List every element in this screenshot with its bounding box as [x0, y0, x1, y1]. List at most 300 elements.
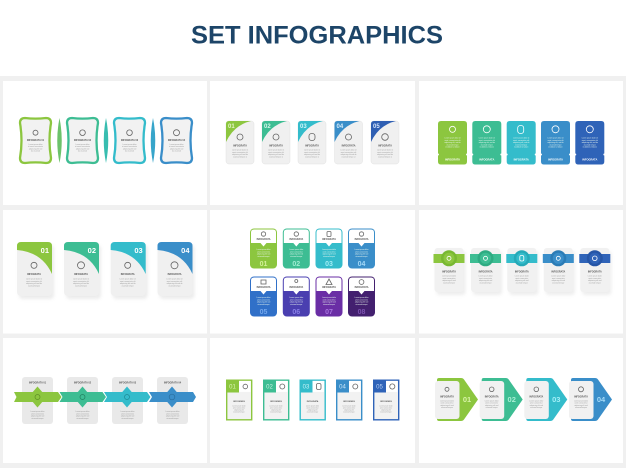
grey card 4: eiusmod tempor [166, 417, 179, 420]
card 02: eiusmod tempor [75, 284, 87, 287]
grey card 2: INFOGRATA 02 [74, 382, 92, 384]
grey card 4 [157, 377, 188, 424]
ticket 2: adipiscing elit, sed do [479, 141, 495, 144]
card 07 [316, 276, 342, 316]
card 04 [334, 121, 362, 164]
card 05: adipiscing elit sed do [377, 153, 393, 156]
card 06: amet consectetur [290, 298, 303, 301]
card 05: INFOGRATA [257, 286, 271, 289]
arrow card 04: eiusmod tempor [575, 406, 587, 409]
arrow card 02: Lorem ipsum dolor [485, 400, 499, 402]
card 1: eiusmod tempor [443, 281, 455, 284]
grey card 4: INFOGRATA 04 [164, 382, 182, 384]
card 08: INFOGRATA [355, 286, 369, 289]
title: SET INFOGRAPHICS [191, 22, 443, 50]
card 2: Lorem ipsum dolor [479, 276, 492, 278]
arrow card 04: 04 [597, 395, 606, 404]
card 06: adipiscing elit sed [290, 301, 303, 304]
card 2: amet consectetur [479, 277, 492, 280]
card 1: do eiusmod [31, 151, 40, 153]
card 01: INFOGRATA [233, 144, 247, 148]
card 03: INFOGRATA [305, 144, 319, 148]
card 5: Lorem ipsum dolor [588, 276, 602, 278]
card 04: Lorem ipsum dolor sit [166, 278, 183, 280]
ticket 1: incididunt ut labore [445, 146, 460, 149]
card 05: adipiscing elit sed [257, 301, 270, 304]
arrow card 03: INFOGRATA [529, 396, 543, 398]
ticket 5 [575, 121, 604, 164]
card 05: INFOGRATA [378, 144, 392, 148]
card 04: amet consectetur elit [167, 280, 183, 283]
card 5: INFOGRATA [588, 270, 602, 274]
card 08: Lorem ipsum dolor [355, 297, 368, 299]
card 05: Lorem ipsum dolor [257, 297, 270, 299]
arrow card 02 [480, 378, 523, 421]
grey card 3: amet consectetur [121, 412, 134, 415]
ticket 1: Lorem ipsum dolor sit [444, 138, 461, 140]
card 1: INFOGRATA 01 [27, 139, 45, 142]
arrow card 04: Lorem ipsum dolor [574, 400, 588, 402]
ticket 3 [507, 121, 536, 164]
arrow card 02: adipiscing elit sed [485, 404, 498, 407]
card 03 [316, 228, 342, 268]
card 02: adipiscing elit [271, 408, 281, 412]
card 05: Lorem ipsum dolor [379, 406, 393, 408]
card 2: INFOGRATA 02 [74, 139, 92, 142]
card 02: INFOGRATA [289, 238, 303, 241]
card 05: 05 [373, 124, 380, 130]
card 04: adipiscing elit sed do [341, 153, 356, 156]
arrow card 01: INFOGRATA [440, 396, 454, 398]
ticket 1: amet, consectetur elit [444, 139, 461, 142]
grey card 4: Lorem ipsum dolor [166, 411, 179, 413]
grey card 1: eiusmod tempor [31, 417, 44, 420]
card 3 [506, 248, 538, 295]
divider lens 1 [57, 118, 62, 163]
grey card 2: Lorem ipsum dolor [76, 411, 89, 413]
card 04: INFOGRATA [355, 238, 369, 241]
card 02: amet consectetur elit [73, 280, 89, 283]
card 03: Lorem ipsum dolor sit [120, 278, 136, 280]
card 03: eiusmod tempor [122, 284, 134, 287]
card 08: amet consectetur [355, 298, 368, 301]
card 5: amet consectetur [588, 277, 602, 280]
card 08 [348, 276, 375, 316]
card 02: 02 [266, 384, 273, 390]
card 01: amet consectetur elit [232, 151, 248, 154]
grey card 2: eiusmod tempor [76, 417, 89, 420]
card 04: INFOGRATA [168, 273, 182, 276]
card 3 [114, 118, 145, 163]
card 2: INFOGRATA [479, 270, 493, 274]
card 02: INFOGRATA [269, 144, 283, 148]
grey card 1 [22, 377, 53, 424]
card 01: adipiscing elit sed do [26, 282, 42, 285]
arrow card 03: eiusmod tempor [530, 406, 543, 409]
card 05 [373, 380, 399, 420]
card 04: 04 [336, 124, 344, 130]
card 04: eiusmod tempor [343, 410, 355, 414]
arrow card 03: amet consectetur [530, 402, 543, 405]
card 06: Lorem ipsum dolor [289, 297, 303, 299]
ticket 3: eiusmod tempor [515, 143, 528, 146]
card 04: INFOGRATA [342, 144, 356, 148]
ticket 4: INFOGRATA [548, 158, 563, 162]
card 01: Lorem ipsum dolor sit [232, 150, 248, 152]
panel: arrow timeline [3, 338, 207, 463]
card 01: eiusmod tempor [28, 284, 40, 287]
card 1: sit amet consectetur [28, 145, 43, 148]
card 04: Lorem ipsum dolor sit [340, 150, 357, 152]
card 08: 08 [358, 309, 365, 316]
card 04: adipiscing elit sed do [167, 282, 182, 285]
card 03 [298, 121, 326, 164]
card 05: INFOGRATA [380, 400, 392, 403]
card 5: adipiscing elit sed [588, 279, 602, 282]
card 05: eiusmod tempor [257, 303, 270, 306]
panel: eight pointer cards [210, 210, 415, 334]
arrow card 01: eiusmod tempor [441, 406, 453, 409]
card 3: Lorem ipsum dolor [515, 276, 529, 278]
card 3: Lorem ipsum dolor [123, 144, 136, 146]
card 02: amet consectetur [290, 250, 303, 253]
card 04 [336, 380, 362, 420]
grey card 4: adipiscing elit sed [166, 415, 179, 418]
ticket 3: adipiscing elit, sed do [513, 141, 529, 144]
card 05 [250, 276, 277, 316]
card 02: INFOGRATA [74, 273, 88, 276]
ticket 2 [472, 121, 501, 164]
card 03: INFOGRATA [121, 273, 135, 276]
grey card 2: adipiscing elit sed [76, 415, 89, 418]
card 02: eiusmod tempor ut [269, 155, 284, 158]
card 3: INFOGRATA [515, 270, 529, 274]
card 01: eiusmod tempor [257, 255, 270, 258]
card 02: adipiscing elit sed do [73, 282, 89, 285]
card 01: Lorem ipsum dolor sit [26, 278, 42, 280]
card 3: amet consectetur [515, 277, 529, 280]
card 04: eiusmod tempor [355, 255, 368, 258]
card 01: INFOGRATA [233, 400, 245, 403]
card 03: INFOGRATA [322, 238, 336, 241]
card 03: amet consectetur elit [304, 151, 320, 154]
card 04: amet consectetur elit [341, 151, 357, 154]
card 02 [262, 121, 290, 164]
card 1 [20, 118, 51, 163]
card 01: 01 [260, 261, 267, 268]
card 03: eiusmod tempor [307, 410, 319, 414]
card 06: INFOGRATA [289, 286, 303, 289]
arrow card 03: 03 [552, 395, 560, 404]
card 03: adipiscing elit sed do [304, 153, 320, 156]
panel: outlined cards with number tab [210, 338, 415, 463]
card 05: 05 [260, 309, 267, 316]
card 02: eiusmod tempor [270, 410, 282, 414]
card 03: INFOGRATA [307, 400, 319, 403]
card 08: adipiscing elit sed [355, 301, 368, 304]
card 4 [161, 118, 192, 163]
card 01: amet consectetur [233, 406, 246, 410]
card 04: eiusmod tempor [168, 284, 181, 287]
card 01: 01 [41, 246, 49, 255]
card 06: eiusmod tempor [290, 303, 303, 306]
card 01: Lorem ipsum dolor [232, 406, 246, 408]
card 2 [470, 248, 502, 295]
ticket 2: eiusmod tempor [481, 143, 493, 146]
panel: band and circle cards [419, 210, 623, 334]
ticket 1: INFOGRATA [445, 158, 460, 162]
card 05: eiusmod tempor ut [378, 155, 393, 158]
card 01: Lorem ipsum dolor [257, 249, 270, 251]
arrow card 02: INFOGRATA [485, 396, 499, 398]
card 4: Lorem ipsum dolor [551, 276, 565, 278]
arrow card 04: INFOGRATA [574, 396, 588, 398]
panel: curved top cards [3, 210, 207, 334]
card 01: INFOGRATA [27, 273, 41, 276]
card 4: eiusmod tempor [552, 281, 565, 284]
card 02: amet consectetur elit [268, 151, 284, 154]
card 03: eiusmod tempor [323, 255, 335, 258]
card 03 [300, 380, 325, 420]
card 02 [64, 242, 101, 299]
card 04: amet consectetur [343, 406, 356, 410]
card 02: adipiscing elit sed do [268, 153, 284, 156]
card 02: Lorem ipsum dolor sit [73, 278, 89, 280]
card 3: adipiscing elit sed [123, 147, 136, 150]
card 05: 05 [376, 384, 383, 390]
grey card 2: amet consectetur [76, 412, 89, 415]
card 03: amet consectetur elit [120, 280, 136, 283]
card 02 [263, 380, 289, 420]
card 05: eiusmod tempor [380, 410, 392, 414]
grey card 3: Lorem ipsum dolor [121, 411, 134, 413]
card 4: do eiusmod [172, 151, 181, 153]
card 01: adipiscing elit sed do [232, 153, 248, 156]
card 04: eiusmod tempor ut [342, 155, 356, 158]
grey card 3 [112, 377, 143, 424]
card 03: 03 [303, 384, 310, 390]
arrow 2 [60, 386, 106, 408]
card 04: adipiscing elit sed [355, 253, 368, 256]
card 02 [283, 228, 310, 268]
grey card 3: eiusmod tempor [121, 417, 134, 420]
card 01: adipiscing elit sed [257, 253, 270, 256]
ticket 5: Lorem ipsum dolor sit [582, 138, 598, 140]
card 2 [67, 118, 98, 163]
card 01: 01 [228, 124, 235, 130]
card 07: 07 [325, 309, 333, 316]
card 3: do eiusmod [125, 151, 134, 153]
ticket 5: adipiscing elit, sed do [582, 141, 598, 144]
card 04: 04 [358, 261, 365, 268]
card 02: eiusmod tempor [290, 255, 303, 258]
arrow card 02: eiusmod tempor [486, 406, 498, 409]
card 05: adipiscing elit [381, 408, 391, 412]
card 4: Lorem ipsum dolor [170, 144, 183, 146]
card 03: eiusmod tempor ut [305, 155, 320, 158]
card 1: Lorem ipsum dolor [29, 144, 42, 146]
arrow card 02: 02 [508, 395, 516, 404]
card 01: INFOGRATA [257, 238, 271, 241]
card 4: sit amet consectetur [169, 145, 184, 148]
arrow 1 [14, 386, 62, 408]
ticket 4: eiusmod tempor [549, 143, 562, 146]
card 04: adipiscing elit [344, 408, 354, 412]
card 2: adipiscing elit sed [479, 279, 492, 282]
card 02: adipiscing elit sed [290, 253, 303, 256]
card 03 [111, 242, 148, 299]
card 2: eiusmod tempor [479, 281, 492, 284]
card 03: adipiscing elit [308, 408, 318, 412]
card 07: Lorem ipsum dolor [322, 297, 336, 299]
arrow 3 [104, 386, 150, 408]
card 1 [434, 248, 466, 295]
grey card 1: INFOGRATA 01 [29, 382, 47, 384]
ticket 1 [438, 121, 467, 164]
card 05: Lorem ipsum dolor sit [377, 150, 393, 152]
card 1: INFOGRATA [442, 270, 456, 274]
ticket 4: amet, consectetur elit [547, 139, 564, 142]
arrow card 04: amet consectetur [575, 402, 588, 405]
card 02: 02 [292, 261, 300, 268]
arrow card 04 [569, 378, 612, 421]
ticket 5: incididunt ut labore [583, 146, 597, 149]
ticket 5: amet, consectetur elit [582, 139, 598, 142]
ticket 4: Lorem ipsum dolor sit [547, 138, 564, 140]
card 2: Lorem ipsum dolor [76, 144, 89, 146]
card 04 [348, 228, 375, 268]
card 5 [579, 248, 611, 295]
arrow card 01: adipiscing elit sed [440, 404, 454, 407]
card 2: adipiscing elit sed [76, 147, 89, 150]
card 03: adipiscing elit sed [322, 253, 336, 256]
card 06: 06 [292, 309, 300, 316]
grey card 3: adipiscing elit sed [121, 415, 134, 418]
card 01: adipiscing elit [234, 408, 244, 412]
card 3: sit amet consectetur [122, 145, 137, 148]
ticket 1: adipiscing elit, sed do [444, 141, 461, 144]
ticket 1: eiusmod tempor [446, 143, 459, 146]
panel: ticket cards [419, 81, 623, 205]
ticket 5: INFOGRATA [582, 158, 597, 162]
card 07: adipiscing elit sed [322, 301, 336, 304]
card 4: adipiscing elit sed [170, 147, 183, 150]
card 01 [226, 380, 252, 420]
grey card 3: INFOGRATA 03 [119, 382, 137, 384]
card 03: Lorem ipsum dolor [306, 406, 319, 408]
ticket 3: INFOGRATA [514, 158, 529, 162]
card 01: eiusmod tempor ut [233, 155, 248, 158]
card 03: adipiscing elit sed do [120, 282, 136, 285]
card 03: amet consectetur [323, 250, 336, 253]
ticket 3: incididunt ut labore [514, 146, 528, 149]
ticket 3: Lorem ipsum dolor sit [513, 138, 529, 140]
card 04 [158, 242, 194, 299]
card 07: eiusmod tempor [323, 303, 335, 306]
card 01 [17, 242, 54, 299]
card 03: 03 [134, 246, 143, 255]
card 2: sit amet consectetur [75, 145, 90, 148]
card 08: eiusmod tempor [355, 303, 368, 306]
card 02: 02 [264, 124, 271, 130]
panel: concave outlined cards [3, 81, 207, 205]
card 3: adipiscing elit sed [515, 279, 529, 282]
card 3: INFOGRATA 03 [121, 139, 139, 142]
card 04: 04 [181, 246, 190, 255]
ticket 2: INFOGRATA [479, 158, 494, 162]
card 05: amet consectetur [380, 406, 393, 410]
arrow 4 [149, 386, 196, 408]
card 03: Lorem ipsum dolor [322, 249, 336, 251]
card 01: amet consectetur elit [26, 280, 42, 283]
card 2: do eiusmod [78, 151, 87, 153]
card 4: INFOGRATA [551, 270, 565, 274]
card 03: 03 [300, 124, 307, 130]
ticket 4 [541, 121, 570, 164]
ticket 4: adipiscing elit, sed do [547, 141, 564, 144]
grey card 4: amet consectetur [166, 412, 179, 415]
card 01 [226, 121, 254, 164]
card 02: 02 [88, 246, 96, 255]
arrow card 03: adipiscing elit sed [530, 404, 543, 407]
card 02: Lorem ipsum dolor [289, 249, 303, 251]
card 02: Lorem ipsum dolor [269, 406, 283, 408]
card 01: amet consectetur [257, 250, 270, 253]
card 1: amet consectetur [443, 277, 456, 280]
card 02: amet consectetur [270, 406, 283, 410]
ticket 3: amet, consectetur elit [513, 139, 530, 142]
card 04: INFOGRATA [343, 400, 355, 403]
arrow card 01 [435, 378, 478, 421]
arrow card 04: adipiscing elit sed [574, 404, 588, 407]
arrow card 02: amet consectetur [485, 402, 499, 405]
card 05: amet consectetur elit [377, 151, 393, 154]
card 04: Lorem ipsum dolor [342, 406, 356, 408]
card 03: amet consectetur [306, 406, 319, 410]
ticket 5: eiusmod tempor [584, 143, 596, 146]
grey card 1: adipiscing elit sed [31, 415, 44, 418]
card 01: eiusmod tempor [233, 410, 245, 414]
card 04: 04 [339, 384, 346, 390]
divider lens 2 [104, 118, 108, 163]
card 03: 03 [325, 261, 333, 268]
arrow card 01: amet consectetur [441, 402, 454, 405]
card 07: INFOGRATA [322, 286, 336, 289]
divider lens 3 [151, 118, 155, 163]
card 1: adipiscing elit sed [29, 147, 42, 150]
arrow card 03 [524, 378, 567, 421]
card 5: eiusmod tempor [589, 281, 601, 284]
ticket 4: incididunt ut labore [548, 146, 563, 149]
card 1: adipiscing elit sed [442, 279, 456, 282]
card 01: 01 [229, 384, 236, 390]
grey card 1: Lorem ipsum dolor [31, 411, 44, 413]
card 4: INFOGRATA 04 [168, 139, 186, 142]
panel: pentagon arrow cards [419, 338, 623, 463]
ticket 2: incididunt ut labore [480, 146, 494, 149]
card 05 [371, 121, 399, 164]
card 07: amet consectetur [323, 298, 336, 301]
ticket 2: Lorem ipsum dolor sit [479, 138, 495, 140]
card 04: amet consectetur [355, 250, 368, 253]
card 03: Lorem ipsum dolor sit [304, 150, 320, 152]
card 06 [283, 276, 310, 316]
arrow card 01: Lorem ipsum dolor [440, 400, 454, 402]
card 1: Lorem ipsum dolor [442, 276, 456, 278]
card 04: Lorem ipsum dolor [355, 249, 368, 251]
card 4: amet consectetur [552, 277, 565, 280]
ticket 2: amet, consectetur elit [479, 139, 495, 142]
